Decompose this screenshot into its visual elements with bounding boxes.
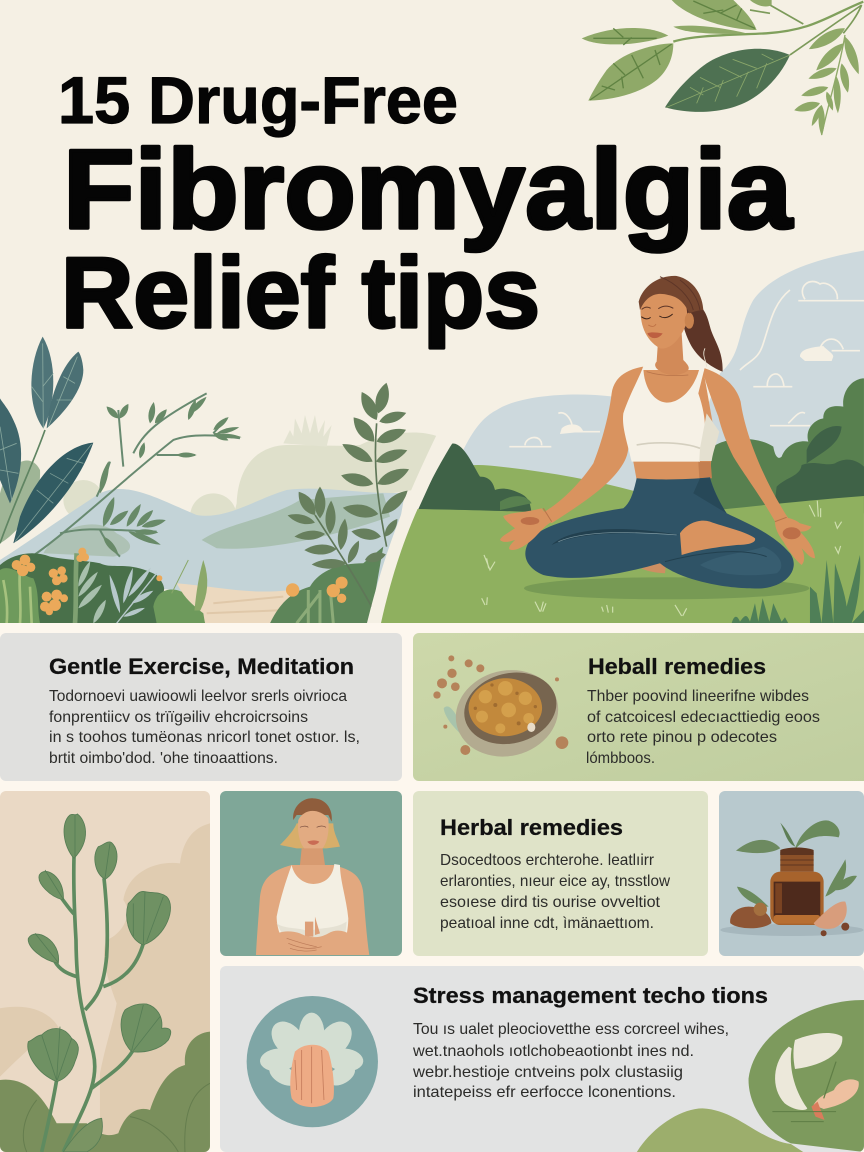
hair front — [639, 276, 703, 313]
body text — [412, 1021, 729, 1101]
bushes — [0, 1032, 210, 1152]
illustration: woman meditating — [500, 276, 864, 623]
big teal leaves — [0, 337, 93, 543]
leaves — [736, 820, 857, 907]
leggings — [525, 477, 794, 588]
body text — [586, 688, 820, 767]
body text — [49, 688, 360, 767]
title line 3: Relief tips — [61, 237, 540, 349]
foliage bottom — [0, 553, 205, 625]
body text: esoıese dird tis ourise ovveltiot — [440, 894, 661, 911]
lower page background — [0, 623, 864, 1152]
right hand — [775, 518, 815, 565]
body text — [440, 852, 670, 932]
body text: Todornoevi uawioowli leelvor srerls oivrioca — [49, 688, 347, 705]
hero background — [0, 0, 864, 624]
torso with arms — [256, 865, 369, 955]
title — [58, 63, 793, 349]
left arm — [542, 367, 643, 523]
foot — [680, 521, 755, 555]
body text: of catcoicesl edecıacttiedig eoos — [587, 709, 820, 726]
ground shadow — [524, 577, 809, 599]
mouth — [647, 332, 663, 338]
panel: gentle exercise — [0, 633, 402, 781]
illustration: left nature landscape — [0, 337, 438, 625]
body text: wet.tnaohols ıotlchobeaotionbt ines nd. — [412, 1043, 694, 1060]
torso — [630, 370, 713, 480]
body text: lómbboos. — [586, 750, 655, 767]
body text: peatıoal inne cdt, ìmänaettıom. — [440, 915, 654, 932]
body text: Dsocedtoos erchterohe. leatlıirr — [440, 852, 655, 869]
body text: orto rete pinou p odecotes — [587, 729, 777, 746]
hair back — [682, 297, 723, 372]
body text: intatepeiss efr eerfocce lconentions. — [413, 1084, 676, 1101]
meadow — [380, 496, 864, 627]
sprig — [32, 393, 240, 557]
left hand — [500, 508, 552, 550]
sky hills — [464, 394, 636, 491]
hill behind left bush — [473, 465, 634, 515]
heading: Stress management techo tions — [413, 983, 768, 1008]
flowers — [12, 548, 162, 615]
heading: Herbal remedies — [440, 815, 623, 840]
leaves — [28, 814, 171, 1152]
panel: amber jar image — [719, 791, 864, 956]
foreground spiky plants — [732, 555, 864, 623]
body text: brtit oimbo'dod. 'ohe tinoaattions. — [49, 750, 278, 767]
white top — [623, 366, 705, 462]
bushes — [710, 378, 864, 513]
stems — [42, 857, 143, 1152]
stones — [730, 907, 771, 928]
right arm — [702, 367, 788, 523]
neck — [655, 333, 689, 375]
green blobs with botanical illustration — [637, 1000, 864, 1152]
illustration: top-right leafy branch — [582, 0, 863, 136]
panel: stress management — [220, 966, 864, 1152]
illustration: meadow scene background — [380, 250, 864, 627]
title line 2: Fibromyalgia — [63, 127, 793, 252]
grass tufts — [482, 501, 842, 616]
body text: fonprentiicv os trïïgəiliv ehcroicrsoins — [49, 709, 308, 726]
bowl of herbs — [433, 655, 568, 767]
title line 1: 15 Drug-Free — [58, 63, 458, 137]
clouds — [509, 282, 864, 447]
body text: Tou ıs ualet pleociovetthe ess corcreel wihes, — [413, 1021, 729, 1038]
body text: erlaronties, nıeur eice ay, tnsstlow — [440, 873, 670, 890]
closed eyes and brows — [641, 306, 673, 319]
body text: Thber poovind lineerifne wibdes — [587, 688, 809, 705]
body text: in s toohos tumëonas nricorl tonet ostıor. ls, — [49, 729, 360, 746]
panel: herbal remedies — [413, 791, 708, 956]
heading: Heball remedies — [588, 654, 766, 679]
left bush — [418, 444, 532, 512]
face — [640, 291, 687, 349]
heading: Gentle Exercise, Meditation — [49, 654, 354, 679]
face and neck — [298, 811, 329, 853]
panel: heball remedies — [413, 633, 864, 781]
jar — [780, 852, 814, 872]
hands — [279, 930, 347, 955]
circular hand and petals icon — [247, 996, 378, 1127]
body text: webr.hestioje cntveins polx clustasiig — [412, 1064, 683, 1081]
ferns — [286, 381, 412, 607]
panel: tan plant illustration — [0, 791, 210, 1152]
panel: teal person image — [220, 791, 402, 956]
